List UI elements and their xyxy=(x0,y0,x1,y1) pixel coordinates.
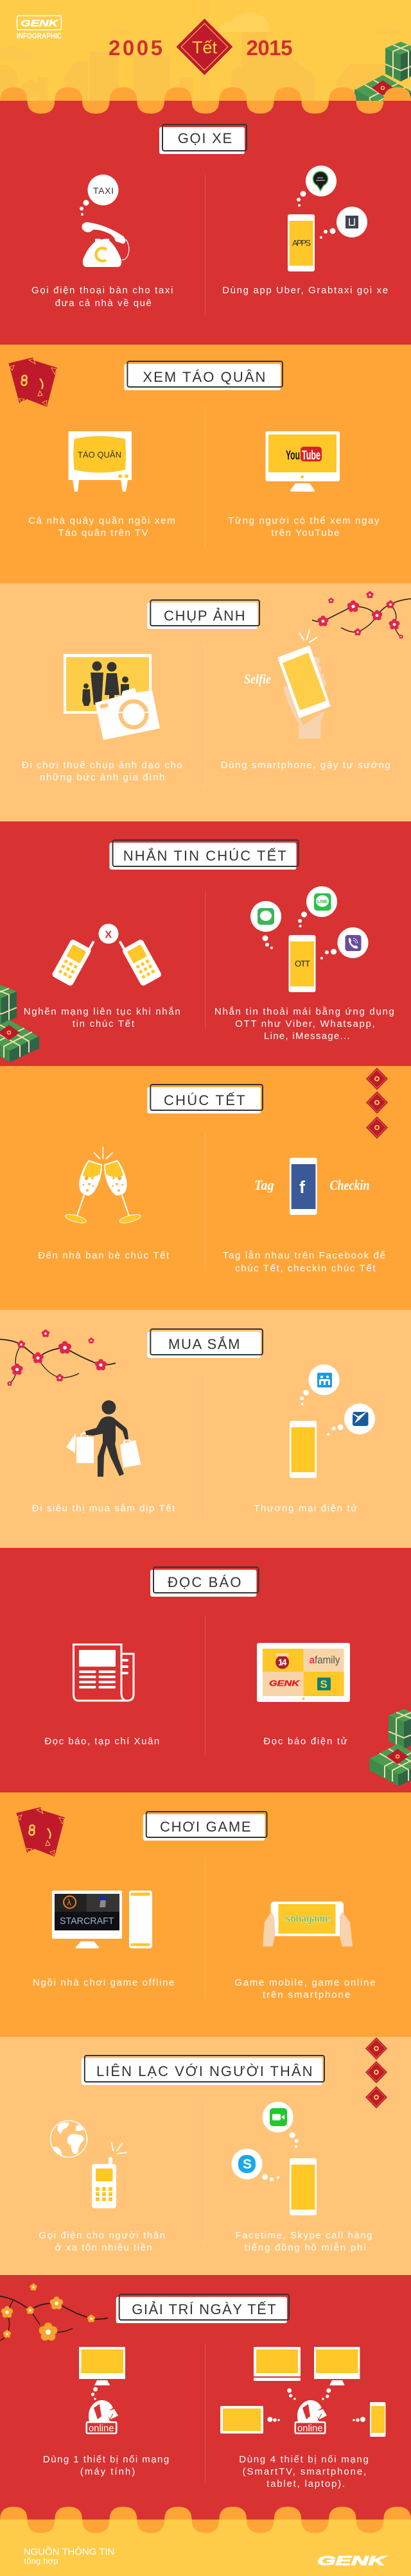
title diamond: Tết xyxy=(176,19,232,75)
heading: Đọc báo: ĐỌC BÁO xyxy=(168,1574,241,1590)
title year 2005: 2005 xyxy=(109,36,162,60)
heading: Đọc báo xyxy=(150,1567,258,1597)
text: dùng 1 thiết bị xyxy=(43,2454,169,2477)
heading: Nhắn tin chúc Tết xyxy=(109,840,298,870)
text: đến nhà: Đến nhà bạn bè chúc Tết xyxy=(38,1250,170,1261)
icon: OTT phone with message apps xyxy=(250,886,369,992)
icon: two feature phones with X: X xyxy=(105,929,112,941)
text: đi chơi: Đi chơi thuê chụp ảnh dạo cho xyxy=(22,760,182,771)
text: gọi điện: Gọi điện cho người thân xyxy=(39,2230,165,2241)
text: nhắn tin OTT: OTT như Viber, Whatsapp, xyxy=(235,1018,375,1029)
decor: banh chung stack xyxy=(355,42,411,117)
icon: desktop computer with games xyxy=(52,1891,152,1948)
text: nghẽn mạng xyxy=(24,1006,180,1029)
icon: taxi bubble with telephone: TAXI xyxy=(93,185,114,196)
heading: Chụp ảnh: CHỤP ẢNH xyxy=(164,608,245,624)
text: tag lẫn nhau: chúc Tết, checkin chúc Tết xyxy=(235,1263,376,1274)
panel: Chúc Tết xyxy=(0,1066,411,1310)
heading: Giải trí ngày Tết xyxy=(116,2294,289,2323)
heading: Gọi xe: GỌI XE xyxy=(178,130,232,146)
text: gọi điện xyxy=(39,2230,165,2253)
text: nhắn tin OTT: Nhắn tin thoải mái bằng ứng dụng xyxy=(214,1006,394,1017)
icon: phone with Facebook, Tag and Checkin: Checkin xyxy=(330,1177,370,1193)
icon: tablet with news sites xyxy=(257,1643,350,1702)
panel: Mua sắm xyxy=(0,1310,411,1548)
heading: Liên lạc với người thân: LIÊN LẠC VỚI NGƯỜI THÂN xyxy=(96,2063,312,2079)
icon: TV showing Táo quân: TÁO QUÂN xyxy=(78,450,121,459)
heading: Chơi game xyxy=(143,1812,267,1841)
text: nghẽn mạng: Nghẽn mạng liên tục khi nhắn xyxy=(24,1006,180,1017)
logo: GENK infographic: INFOGRAPHIC xyxy=(17,33,62,40)
heading: Mua sắm xyxy=(147,1329,263,1358)
panel: header xyxy=(0,0,411,117)
decor: bottom scalloped awning xyxy=(0,2507,411,2533)
panel: Nhắn tin chúc Tết xyxy=(0,821,411,1066)
panel: Giải trí ngày Tết xyxy=(0,2275,411,2520)
panel: footer xyxy=(0,2520,411,2576)
decor: three red diamonds xyxy=(366,1068,388,1138)
text: đọc báo giấy: Đọc báo, tạp chí Xuân xyxy=(44,1736,159,1747)
icon: one computer online xyxy=(79,2347,125,2434)
text: nguồn thông tin xyxy=(24,2546,114,2566)
icon: tablet with news sites: S xyxy=(320,1678,328,1690)
text: gọi taxi xyxy=(31,285,173,309)
decor: yellow blossom branch xyxy=(0,2283,108,2340)
icon: monitor with YouTube: Tube xyxy=(302,449,320,463)
panel: Liên lạc với người thân xyxy=(0,2037,411,2275)
text: nhắn tin OTT xyxy=(214,1006,394,1042)
icon: tablet with sohagame and hands xyxy=(263,1902,353,1946)
icon: taxi bubble with telephone xyxy=(80,175,129,267)
text: smartphone: Dùng smartphone, gậy tự sướng xyxy=(221,760,390,771)
icon: desktop computer with games: STARCRAFT xyxy=(60,1916,114,1927)
heading: Chúc Tết: CHÚC TẾT xyxy=(164,1092,245,1108)
text: cả nhà: Táo quân trên TV xyxy=(58,528,148,538)
icon: desktop computer with games: λ xyxy=(67,1897,71,1907)
text: facetime: Facetime, Skype call hàng xyxy=(235,2230,372,2241)
icon: phone with Facebook, Tag and Checkin xyxy=(254,1158,370,1215)
icon: phone with e-commerce apps xyxy=(290,1364,375,1478)
title year 2015: 2015 xyxy=(247,36,293,60)
icon: smartphone with Grab and Uber apps xyxy=(288,166,367,271)
text: từng người: Từng người có thể xem ngay xyxy=(228,515,380,526)
text: dùng 4 thiết bị xyxy=(239,2454,369,2489)
text: dùng 1 thiết bị: Dùng 1 thiết bị nối mạng xyxy=(43,2454,169,2465)
text: từng người: trên YouTube xyxy=(271,528,339,538)
heading: Chơi game: CHƠI GAME xyxy=(160,1819,251,1835)
heading: Nhắn tin chúc Tết: NHẮN TIN CHÚC TẾT xyxy=(123,848,286,864)
panel: Xem Táo quân xyxy=(0,345,411,583)
decor: banh chung stack xyxy=(0,985,39,1061)
logo: GENK infographic: GENK xyxy=(21,18,59,29)
text: dùng 4 thiết bị: (SmartTV, smartphone, xyxy=(243,2466,366,2477)
icon: globe and feature phone xyxy=(50,2120,127,2208)
clouds xyxy=(0,12,405,59)
text: game mobile: trên smartphone xyxy=(263,1989,350,2000)
decor: red blossom branch xyxy=(312,591,411,639)
icon: shopper with bags xyxy=(66,1400,141,1477)
heading: Liên lạc với người thân xyxy=(82,2056,324,2085)
icon: tablet with sohagame and hands: sohagame xyxy=(285,1912,330,1925)
text: nguồn thông tin: NGUỒN THÔNG TIN xyxy=(24,2546,114,2557)
heading: Xem Táo quân xyxy=(124,361,283,390)
icon: phone with Facebook, Tag and Checkin: Tag xyxy=(254,1177,274,1193)
heading: Giải trí ngày Tết: GIẢI TRÍ NGÀY TẾT xyxy=(132,2301,276,2317)
icon: selfie hand and phone: Selfie xyxy=(244,671,271,687)
icon: selfie hand and phone xyxy=(244,630,330,739)
text: dùng 4 thiết bị: Dùng 4 thiết bị nối mạng xyxy=(239,2454,369,2465)
icon: newspaper xyxy=(73,1644,134,1701)
text: nhắn tin OTT: Line, iMessage... xyxy=(264,1031,349,1042)
text: facetime xyxy=(235,2230,372,2253)
panel: Chụp ảnh xyxy=(0,583,411,821)
panel: Gọi xe xyxy=(0,101,411,345)
decor: three red diamonds xyxy=(365,2038,387,2108)
heading: Chụp ảnh xyxy=(147,600,259,629)
icon: tablet with news sites: afamily xyxy=(310,1654,340,1666)
text: thương mại điện tử: Thương mại điện tử xyxy=(254,1503,357,1514)
icon: two feature phones with X xyxy=(51,924,162,987)
decor: red blossom branch xyxy=(0,1330,116,1386)
panel: Đọc báo xyxy=(0,1548,411,1792)
text: nguồn thông tin: tổng hợp xyxy=(24,2556,58,2566)
icon: phone with FaceTime and Skype: S xyxy=(243,2157,252,2172)
heading: Mua sắm: MUA SẮM xyxy=(168,1336,240,1352)
icon: monitor with YouTube xyxy=(266,431,340,492)
text: gọi taxi: Gọi điện thoại bàn cho taxi xyxy=(31,285,173,296)
decor: red envelopes xyxy=(9,357,57,407)
icon: OTT phone with message apps: LINE xyxy=(317,900,328,904)
icon: family photo and camera xyxy=(64,654,160,740)
text: cả nhà xyxy=(28,515,175,538)
text: cả nhà: Cả nhà quây quần ngồi xem xyxy=(28,515,175,526)
text: nghẽn mạng: tin chúc Tết xyxy=(73,1018,135,1029)
icon: phone with FaceTime and Skype xyxy=(231,2102,317,2215)
text: dùng 4 thiết bị: tablet, laptop). xyxy=(267,2478,345,2489)
panel: Chơi game xyxy=(0,1792,411,2037)
decor: red envelopes xyxy=(17,1807,65,1857)
text: đi chơi xyxy=(22,760,182,783)
text: game mobile xyxy=(234,1977,375,2000)
text: tag lẫn nhau xyxy=(223,1250,385,1274)
icon: tablet with news sites: 14 xyxy=(278,1657,287,1667)
text: gọi taxi: đưa cả nhà về quê xyxy=(55,298,152,309)
heading: Gọi xe xyxy=(159,125,247,154)
text: ngồi nhà: Ngồi nhà chơi game offline xyxy=(33,1977,174,1988)
icon: OTT phone with message apps: OTT xyxy=(295,959,310,968)
icon: champagne glasses xyxy=(64,1147,142,1224)
text: dùng app: Dùng app Uber, Grabtaxi gọi xe xyxy=(222,285,388,296)
text: gọi điện: ở xa tốn nhiều tiền xyxy=(55,2242,152,2253)
icon: smartphone with Grab and Uber apps: APPS xyxy=(292,238,311,248)
city skyline background xyxy=(0,0,385,105)
icon: tablet with news sites: GENK xyxy=(269,1679,301,1688)
text: dùng 1 thiết bị: (máy tính) xyxy=(80,2466,135,2477)
title diamond: Tết: Tết xyxy=(192,38,217,57)
text: đi siêu thị: Đi siêu thị mua sắm dịp Tết xyxy=(32,1503,175,1514)
decor: top scalloped awning xyxy=(0,87,411,114)
text: tag lẫn nhau: Tag lẫn nhau trên Facebook để xyxy=(223,1250,385,1261)
logo: GENK: GENK xyxy=(317,2554,387,2568)
icon: TV showing Táo quân xyxy=(68,431,132,492)
heading: Xem Táo quân: XEM TÁO QUÂN xyxy=(143,369,265,385)
text: đọc báo điện tử: Đọc báo điện tử xyxy=(263,1736,347,1747)
icon: phone with Facebook, Tag and Checkin: f xyxy=(299,1178,306,1197)
text: từng người xyxy=(228,515,380,538)
icon: four devices online xyxy=(220,2347,385,2437)
text: game mobile: Game mobile, game online xyxy=(234,1977,375,1988)
text: đi chơi: những bức ảnh gia đình xyxy=(40,772,164,783)
decor: banh chung stack xyxy=(370,1709,411,1785)
logo: GENK infographic xyxy=(17,15,62,40)
text: facetime: tiếng đồng hồ miễn phí xyxy=(245,2242,367,2253)
heading: Chúc Tết xyxy=(147,1085,263,1113)
icon: monitor with YouTube: You xyxy=(286,449,300,463)
